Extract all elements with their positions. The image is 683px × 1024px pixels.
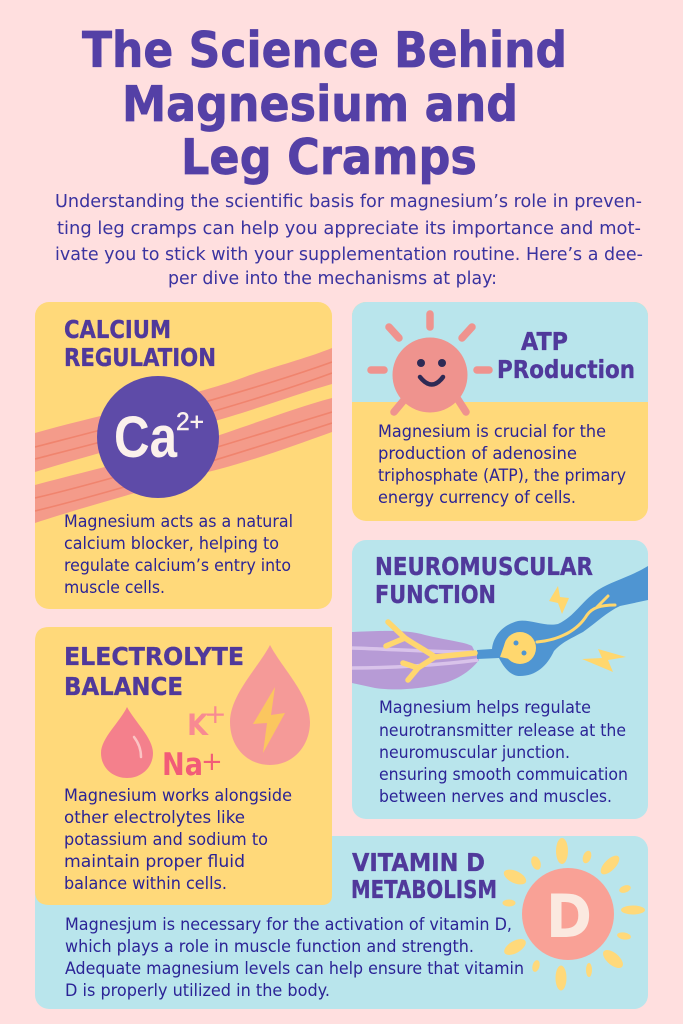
heading: ATP production: PRoduction	[497, 355, 635, 384]
text: vitamin D: which plays a role in muscle function and strength.	[65, 937, 474, 956]
heading: neuromuscular function	[375, 552, 593, 609]
text: vitamin D: D is properly utilized in the body.	[65, 981, 330, 1000]
label: potassium ion: +	[204, 699, 227, 730]
neuron nucleus	[500, 632, 536, 664]
text: vitamin D	[65, 915, 524, 1000]
text: vitamin D: Adequate magnesium levels can help ensure that vitamin	[65, 959, 524, 978]
icon: smiling sun	[371, 314, 489, 412]
text: calcium: muscle cells.	[64, 578, 165, 597]
heading: ATP production: ATP	[521, 327, 568, 356]
text: neuromuscular: Magnesium helps regulate	[379, 698, 591, 717]
heading: neuromuscular function: NEUROMUSCULAR	[375, 552, 593, 581]
title: Leg Cramps	[181, 129, 477, 186]
text: ATP: Magnesium is crucial for the	[378, 422, 606, 441]
calcium ion circle	[97, 376, 219, 498]
text: calcium: calcium blocker, helping to	[64, 534, 279, 553]
intro paragraph: Understanding the scientific basis for magnesium’s role in preven-	[55, 192, 642, 212]
text: ATP	[378, 422, 626, 507]
heading: electrolyte balance	[64, 642, 244, 701]
text: calcium: regulate calcium’s entry into	[64, 556, 291, 575]
text: electrolyte: maintain proper fluid	[64, 852, 245, 871]
heading: vitamin D metabolism	[351, 848, 497, 904]
panel: electrolyte balance	[35, 627, 332, 905]
intro paragraph	[55, 192, 643, 289]
text: neuromuscular: ensuring smooth commuication	[379, 765, 628, 784]
panel: calcium regulation	[35, 302, 332, 609]
muscle fibre	[352, 631, 479, 689]
text: electrolyte	[64, 786, 292, 893]
muscle fibre bands	[35, 348, 332, 523]
text: neuromuscular	[379, 698, 628, 806]
intro paragraph: ivate you to stick with your supplementation routine. Here’s a dee-	[55, 245, 643, 265]
text: vitamin D: Magnesjum is necessary for the activation of vitamin D,	[65, 915, 512, 934]
heading: electrolyte balance: ELECTROLYTE	[64, 642, 244, 671]
label: potassium ion	[187, 699, 227, 742]
calcium ion circle: Ca	[114, 405, 178, 470]
text: neuromuscular: neuromuscular junction.	[379, 743, 570, 762]
illustration: neuron and muscle	[352, 566, 648, 689]
heading: ATP production	[497, 327, 635, 384]
label: sodium ion: Na	[162, 747, 203, 783]
heading: calcium regulation	[64, 315, 216, 372]
neuron	[477, 566, 648, 676]
text: electrolyte: Magnesium works alongside	[64, 786, 292, 805]
intro paragraph: per dive into the mechanisms at play:	[168, 269, 497, 289]
icon: vitamin D sun	[502, 838, 645, 990]
icon: large drop with bolt	[230, 645, 310, 765]
text: neuromuscular: neurotransmitter release at the	[379, 721, 626, 740]
heading: vitamin D metabolism: METABOLISM	[351, 875, 497, 904]
calcium ion circle: 2+	[176, 408, 204, 436]
text: electrolyte: other electrolytes like	[64, 808, 245, 827]
text: ATP: triphosphate (ATP), the primary	[378, 466, 626, 485]
heading: calcium regulation: REGULATION	[64, 343, 216, 372]
heading: neuromuscular function: FUNCTION	[375, 580, 496, 609]
text: ATP: production of adenosine	[378, 444, 577, 463]
panel: ATP production	[352, 302, 648, 521]
title: Magnesium and	[122, 76, 518, 133]
heading: electrolyte balance: BALANCE	[64, 672, 183, 701]
text: electrolyte: potassium and sodium to	[64, 830, 268, 849]
title: The Science Behind	[82, 22, 567, 79]
text: ATP: energy currency of cells.	[378, 488, 576, 507]
text: calcium	[64, 512, 293, 597]
label: potassium ion: K	[187, 708, 209, 742]
panel: vitamin D metabolism	[35, 836, 648, 1009]
heading: calcium regulation: CALCIUM	[64, 315, 171, 344]
heading: vitamin D metabolism: VITAMIN D	[352, 848, 485, 877]
icon: vitamin D sun: D	[546, 882, 592, 952]
title	[82, 22, 567, 186]
spark bolts	[549, 586, 626, 672]
label: sodium ion: +	[201, 747, 223, 777]
text: electrolyte: balance within cells.	[64, 874, 227, 893]
text: neuromuscular: between nerves and muscles.	[379, 787, 612, 806]
panel: neuromuscular function	[352, 540, 648, 819]
text: calcium: Magnesium acts as a natural	[64, 512, 293, 531]
icon: small drop	[101, 707, 153, 778]
intro paragraph: ting leg cramps can help you appreciate its importance and mot-	[57, 219, 641, 239]
nerve branches	[386, 596, 615, 680]
